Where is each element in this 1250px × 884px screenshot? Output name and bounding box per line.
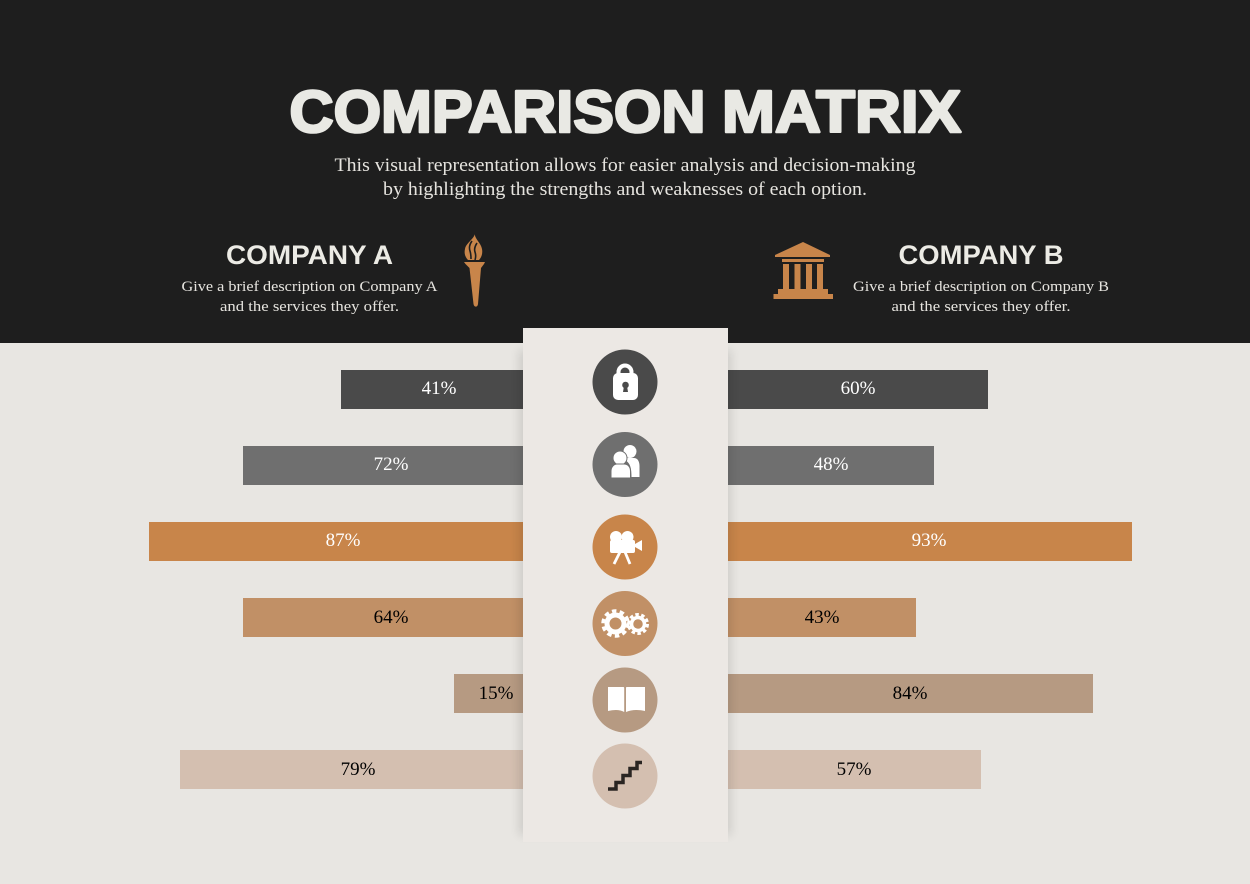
central icon panel <box>523 328 728 842</box>
dark header band <box>0 0 1250 343</box>
company A heading and description: Give a brief description on Company A <box>182 279 438 295</box>
central panel shadow <box>519 350 731 835</box>
company B heading and description <box>853 240 1109 315</box>
row 6 bars: 79% vs 57%: 79% <box>341 759 376 780</box>
row 4 bars: 64% vs 43%: 43% <box>805 607 840 628</box>
row 6 bars: 79% vs 57% <box>180 750 981 789</box>
icon: padlock <box>592 350 658 414</box>
icon: classical building <box>774 242 833 299</box>
row 1 bars: 41% vs 60% <box>341 370 988 409</box>
row 3 bars: 87% vs 93%: 93% <box>912 530 947 551</box>
row 2 bars: 72% vs 48%: 48% <box>814 454 849 475</box>
title: MATRIX <box>722 79 961 145</box>
title <box>290 79 961 145</box>
row 5 bars: 15% vs 84%: 15% <box>479 683 514 704</box>
row 3 bars: 87% vs 93%: 87% <box>326 530 361 551</box>
title: COMPARISON <box>290 79 706 145</box>
company A heading and description <box>182 240 438 315</box>
row 5 bars: 15% vs 84% <box>454 674 1093 713</box>
subtitle: by highlighting the strengths and weaknesses of each option. <box>383 179 867 200</box>
row 5 bars: 15% vs 84%: 84% <box>893 683 928 704</box>
row 2 bars: 72% vs 48% <box>243 446 934 485</box>
icon: people <box>592 432 658 497</box>
icon: torch <box>464 234 485 307</box>
row 1 bars: 41% vs 60%: 41% <box>422 378 457 399</box>
icon: film camera <box>592 514 658 580</box>
icon: open book <box>592 668 658 732</box>
company B heading and description: COMPANY B <box>898 240 1064 270</box>
row 4 bars: 64% vs 43% <box>243 598 916 637</box>
company A heading and description: and the services they offer. <box>220 299 399 315</box>
page background <box>0 343 1250 884</box>
icon: stairs <box>592 744 658 808</box>
row 3 bars: 87% vs 93% <box>149 522 1132 561</box>
icon: gears <box>592 591 658 656</box>
row 1 bars: 41% vs 60%: 60% <box>841 378 876 399</box>
row 6 bars: 79% vs 57%: 57% <box>837 759 872 780</box>
company B heading and description: Give a brief description on Company B <box>853 279 1109 295</box>
subtitle: This visual representation allows for easier analysis and decision-making <box>334 155 916 176</box>
company B heading and description: and the services they offer. <box>892 299 1070 315</box>
subtitle <box>334 155 916 200</box>
row 4 bars: 64% vs 43%: 64% <box>374 607 409 628</box>
company A heading and description: COMPANY A <box>226 240 393 270</box>
row 2 bars: 72% vs 48%: 72% <box>374 454 409 475</box>
